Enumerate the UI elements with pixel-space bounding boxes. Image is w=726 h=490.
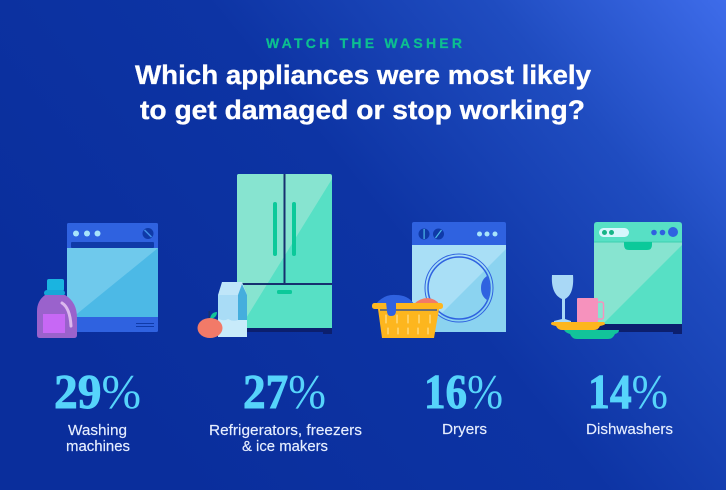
- title: to get damaged or stop working?: [140, 95, 585, 125]
- icon: dishwasher: [594, 222, 682, 334]
- label: Dryers: [442, 422, 487, 438]
- percentage: 29%: [54, 364, 141, 419]
- label: [209, 423, 362, 455]
- icon: dryer: [412, 222, 506, 332]
- eyebrow: WATCH THE WASHER: [266, 35, 462, 51]
- label: & ice makers: [242, 439, 328, 455]
- icon: laundry basket: [372, 295, 443, 338]
- percentage: 27%: [243, 364, 326, 419]
- panel: refrigerators: [198, 174, 362, 455]
- icon: washing machine: [67, 223, 158, 332]
- label: Refrigerators, freezers: [209, 423, 362, 439]
- icon: apple: [198, 311, 222, 338]
- label: Washing: [68, 423, 127, 439]
- panel: washing machines: [37, 223, 158, 455]
- title: Which appliances were most likely: [135, 60, 591, 90]
- label: machines: [66, 439, 130, 455]
- icon: detergent bottle: [37, 279, 77, 338]
- title: [135, 60, 591, 125]
- icon: wine glass: [552, 275, 573, 323]
- percentage: 16%: [424, 364, 503, 419]
- label: Dishwashers: [586, 422, 673, 438]
- icon: milk carton: [218, 282, 247, 337]
- panel: dryers: [372, 222, 506, 438]
- icon: plates: [551, 322, 619, 339]
- icon: refrigerator: [237, 174, 332, 334]
- heading block: [135, 35, 591, 125]
- label: [66, 423, 130, 455]
- percentage: 14%: [588, 364, 668, 419]
- panel: dishwashers: [551, 222, 682, 438]
- icon: mug: [577, 298, 604, 323]
